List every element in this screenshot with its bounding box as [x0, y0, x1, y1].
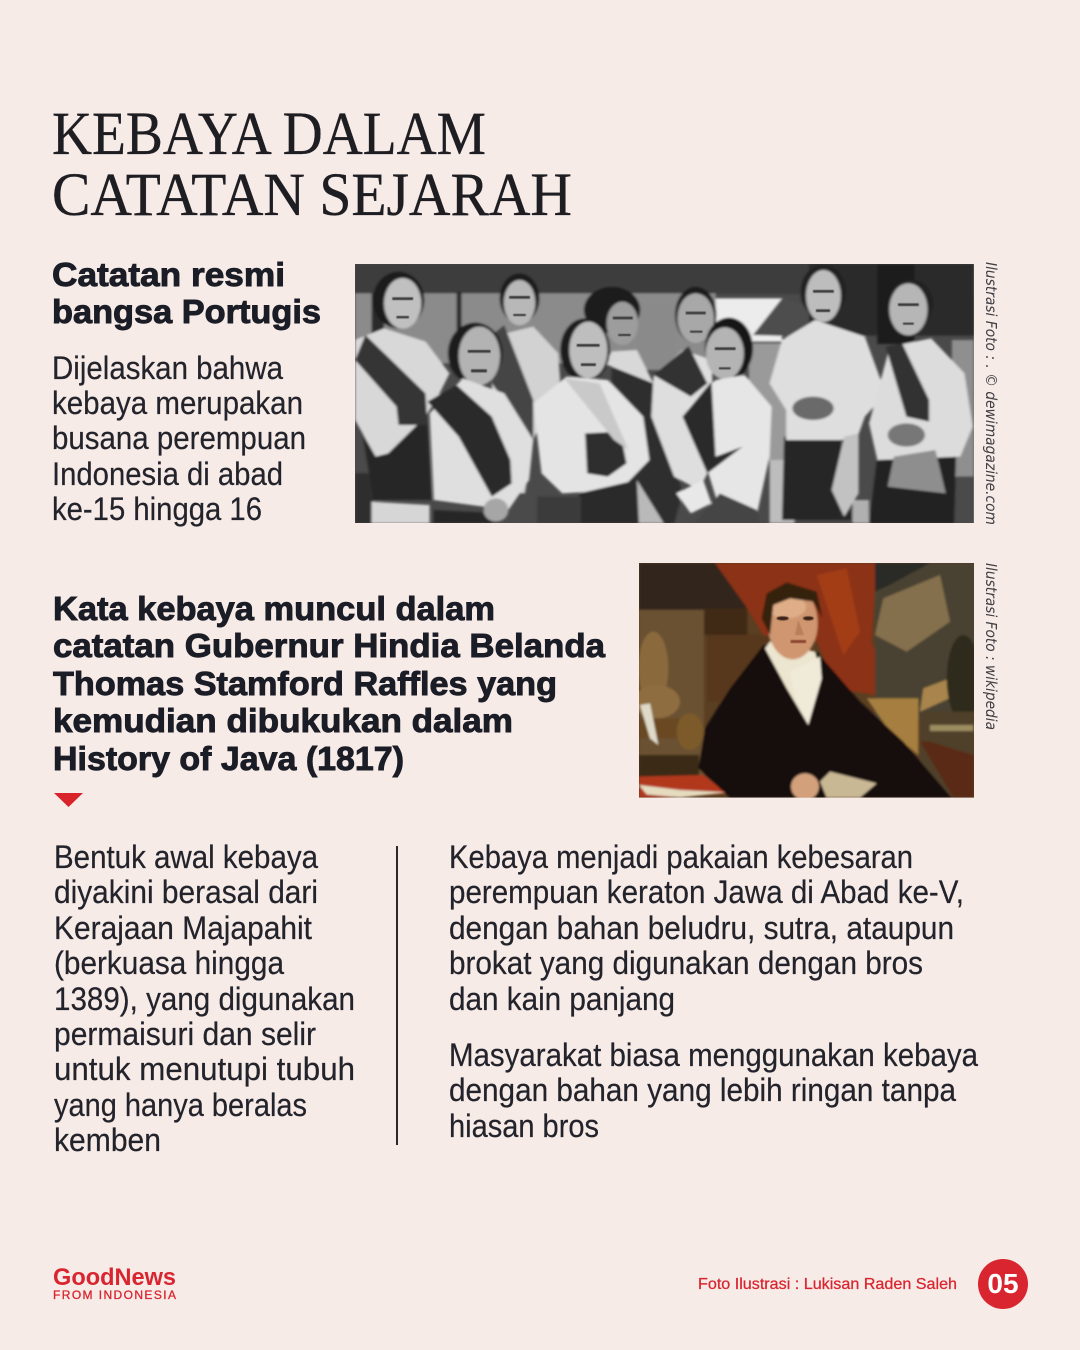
- page number badge: 05: [987, 1268, 1019, 1299]
- title: CATATAN SEJARAH: [52, 162, 572, 229]
- text block: right column: dan kain panjang: [449, 981, 675, 1017]
- text block: left column: diyakini berasal dari: [54, 874, 318, 910]
- woman 1: [373, 272, 424, 328]
- logo: GoodNews from Indonesia: GoodNews: [53, 1264, 176, 1291]
- heading: Raffles: History of Java (1817): [53, 740, 404, 777]
- text block: right column: dengan bahan yang lebih ringan tanpa: [449, 1072, 956, 1108]
- text block: right column: [449, 839, 978, 1144]
- text block: left column: (berkuasa hingga: [54, 945, 284, 981]
- photo: women in kebaya: [355, 264, 974, 523]
- text block: left column: permaisuri dan selir: [54, 1016, 316, 1052]
- heading: Raffles: catatan Gubernur Hindia Belanda: [53, 627, 606, 664]
- text block: right column: perempuan keraton Jawa di Abad ke-V,: [449, 874, 964, 910]
- text block: left column: Kerajaan Majapahit: [54, 910, 312, 946]
- text block: left column: yang hanya beralas: [54, 1087, 307, 1123]
- heading: Raffles: [53, 590, 606, 777]
- woman 2: [448, 323, 503, 384]
- text block: Portuguese record: [52, 350, 306, 527]
- woman 8: [920, 286, 930, 306]
- text block: left column: untuk menutupi tubuh: [54, 1051, 355, 1087]
- photo: portrait of Raffles: [633, 563, 980, 800]
- text block: Portuguese record: busana perempuan: [52, 420, 306, 456]
- text block: right column: dengan bahan beludru, sutra, ataupun: [449, 910, 954, 946]
- text block: left column: 1389), yang digunakan: [54, 981, 355, 1017]
- woman back 5: [675, 287, 716, 343]
- heading: Raffles: kemudian dibukukan dalam: [53, 702, 513, 739]
- text block: left column: Bentuk awal kebaya: [54, 839, 318, 875]
- woman back 4: [584, 287, 640, 333]
- logo: GoodNews from Indonesia: FROM INDONESIA: [53, 1288, 176, 1302]
- icon: red down triangle: [54, 793, 83, 807]
- woman 6: [705, 318, 753, 379]
- title: [52, 101, 572, 229]
- text block: right column: Kebaya menjadi pakaian kebesaran: [449, 839, 913, 875]
- credit: illustration photo: Foto Ilustrasi : Lukisan Raden Saleh: [698, 1276, 957, 1293]
- text block: left column: [54, 839, 355, 1158]
- heading: Raffles: Thomas Stamford Raffles yang: [53, 665, 557, 702]
- text block: right column: hiasan bros: [449, 1108, 599, 1144]
- heading: Raffles: Kata kebaya muncul dalam: [53, 590, 495, 627]
- text block: right column: Masyarakat biasa menggunakan kebaya: [449, 1037, 978, 1073]
- text block: Portuguese record: ke-15 hingga 16: [52, 491, 262, 527]
- woman back 2: [492, 327, 560, 493]
- title: KEBAYA DALAM: [52, 101, 486, 168]
- page number badge: [978, 1259, 1028, 1309]
- woman 3: [560, 318, 610, 382]
- text block: Portuguese record: Dijelaskan bahwa: [52, 350, 283, 386]
- caption: photo credit wikipedia: Ilustrasi Foto : wikipedia: [982, 563, 1000, 730]
- woman 7: [800, 266, 830, 312]
- heading: Catatan resmi bangsa Portugis: Catatan resmi: [52, 256, 285, 293]
- caption: photo credit dewimagazine: Ilustrasi Foto : . © dewimagazine.com: [982, 262, 1000, 525]
- heading: Catatan resmi bangsa Portugis: [52, 256, 321, 330]
- text block: Portuguese record: kebaya merupakan: [52, 385, 303, 421]
- heading: Catatan resmi bangsa Portugis: bangsa Portugis: [52, 293, 321, 330]
- text block: Portuguese record: Indonesia di abad: [52, 456, 283, 492]
- text block: right column: brokat yang digunakan dengan bros: [449, 945, 923, 981]
- text block: left column: kemben: [54, 1122, 161, 1158]
